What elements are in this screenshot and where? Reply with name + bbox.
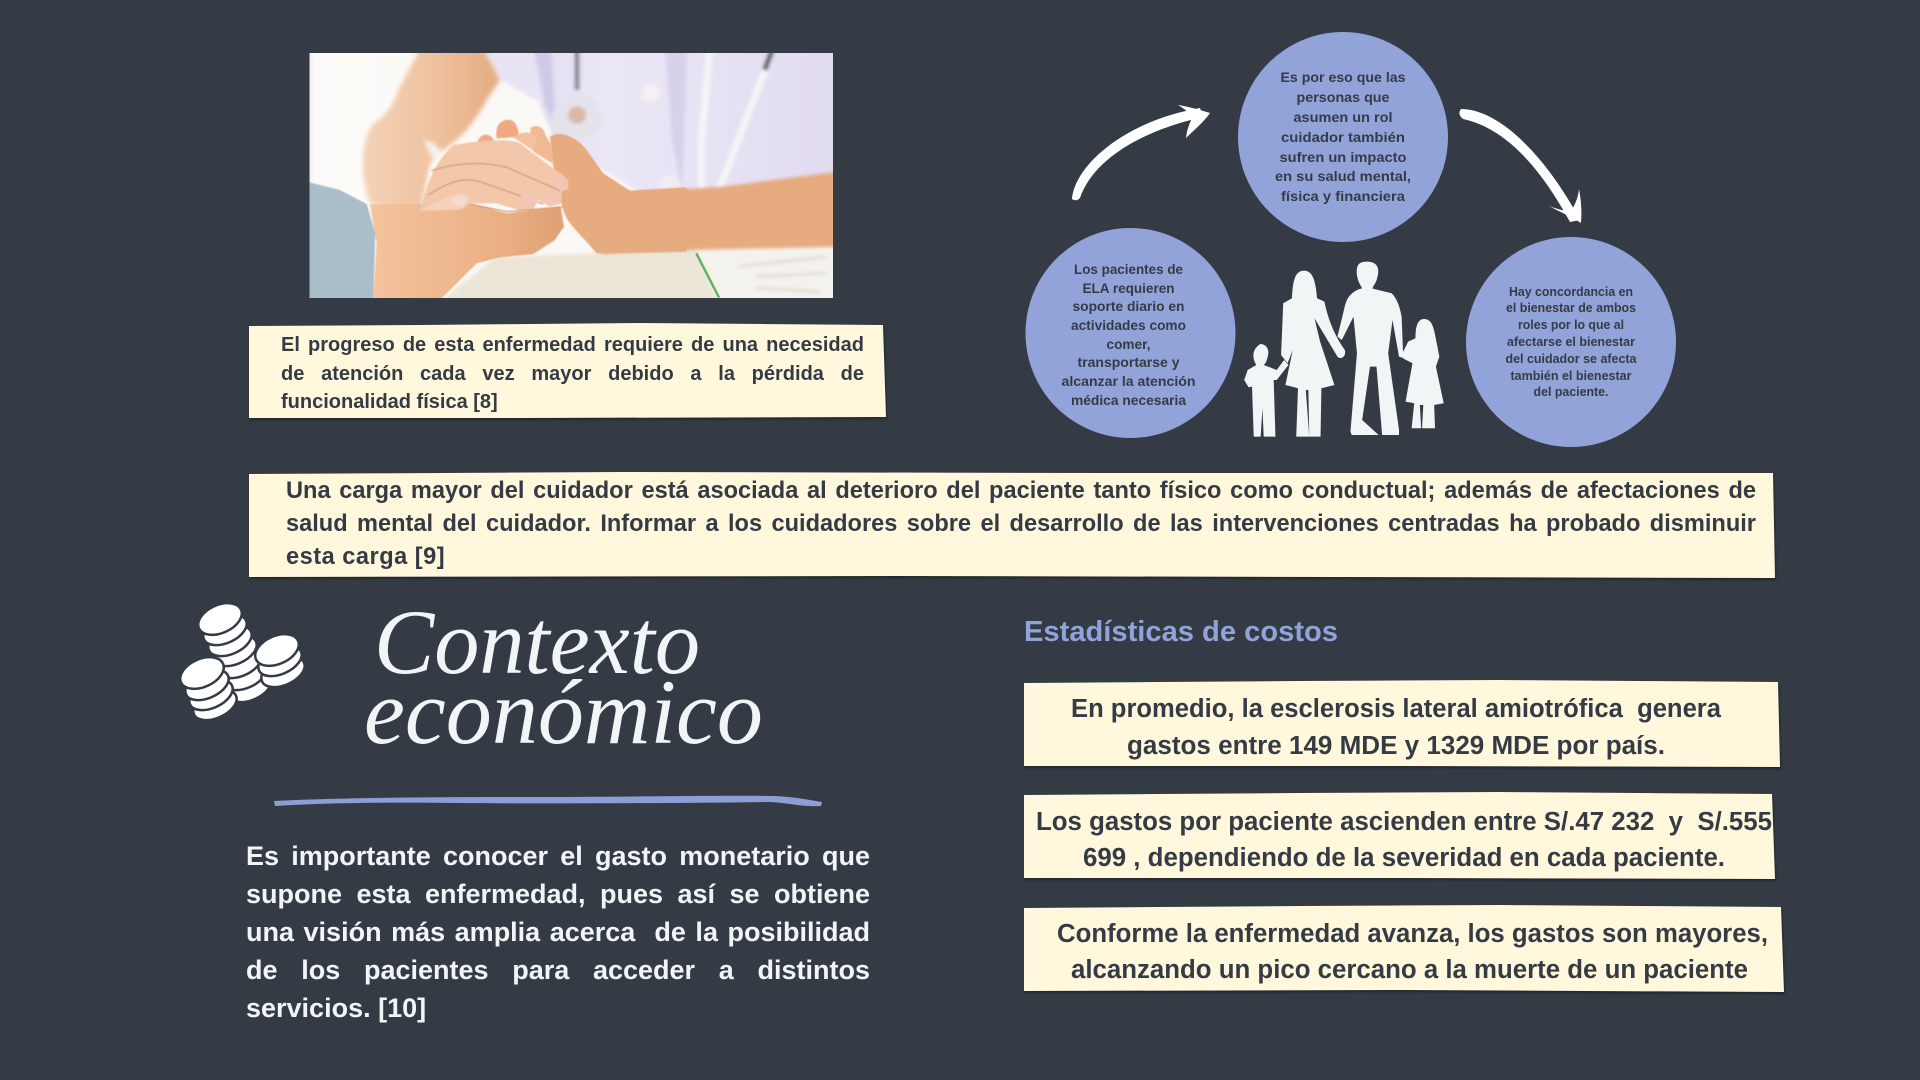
circle: caregivers impact: cuidador también <box>1281 129 1405 145</box>
circle: well-being concordance: el bienestar de ambos <box>1506 300 1636 315</box>
text: why costs matter: una visión más amplia acerca de la posibilidad <box>246 917 870 947</box>
circle: patients need support: Los pacientes de <box>1074 261 1183 277</box>
text: caregiver burden <box>286 478 1756 570</box>
text: caregiver burden: esta carga [9] <box>286 544 445 570</box>
stat box: costs grow with progression: alcanzando un pico cercano a la muerte de un paciente <box>1071 956 1748 984</box>
circle: patients need support: alcanzar la atención <box>1062 373 1196 389</box>
title: Contexto económico: económico <box>364 661 763 763</box>
text: why costs matter: servicios. [10] <box>246 993 426 1023</box>
text: caregiver burden: salud mental del cuidador. Informar a los cuidadores sobre el desarrollo de las intervenciones centradas ha probado disminuir <box>286 511 1756 537</box>
arrow: left circle to top circle <box>1072 105 1210 200</box>
stat box: average cost <box>1024 680 1780 767</box>
text: caregiver burden: Una carga mayor del cuidador está asociada al deterioro del paciente tanto físico como conductual; además de afectaciones de <box>286 478 1756 504</box>
stat box: costs grow with progression <box>1024 905 1784 992</box>
circle: patients need support: transportarse y <box>1078 354 1180 370</box>
circle: well-being concordance: roles por lo que al <box>1518 317 1624 332</box>
title: Contexto económico: Contexto <box>374 591 700 693</box>
stat box: cost per patient: Los gastos por paciente ascienden entre S/.47 232 y S/.555 <box>1036 808 1772 836</box>
title: Contexto económico <box>364 591 763 763</box>
stat box: average cost: gastos entre 149 MDE y 1329 MDE por país. <box>1127 732 1665 760</box>
banner box: caregiver burden <box>249 472 1775 578</box>
photo: caregiver holding patient's hands <box>310 53 833 298</box>
circle: patients need support: médica necesaria <box>1071 392 1186 408</box>
text: why costs matter: Es importante conocer el gasto monetario que <box>246 841 870 871</box>
circle: caregivers impact: asumen un rol <box>1294 109 1392 125</box>
circle: caregivers impact: personas que <box>1296 89 1390 105</box>
circle: well-being concordance <box>1466 237 1676 447</box>
heading: Estadísticas de costos: Estadísticas de costos <box>1024 616 1338 648</box>
circle: caregivers impact: física y financiera <box>1281 188 1405 204</box>
circle: patients need support: actividades como <box>1071 317 1186 333</box>
text: disease progress: de atención cada vez mayor debido a la pérdida de <box>281 362 864 384</box>
circle: well-being concordance: afectarse el bienestar <box>1507 334 1635 349</box>
text: why costs matter <box>246 841 870 1023</box>
text: disease progress <box>281 334 864 413</box>
text: disease progress: funcionalidad física [8] <box>281 391 498 413</box>
stat box: cost per patient: 699 , dependiendo de la severidad en cada paciente. <box>1083 844 1725 872</box>
circle: well-being concordance: del paciente. <box>1534 384 1608 399</box>
circle: caregivers impact: sufren un impacto <box>1280 149 1406 165</box>
circle: caregivers impact: en su salud mental, <box>1275 168 1411 184</box>
circle: patients need support: comer, <box>1106 336 1150 352</box>
circle: patients need support: soporte diario en <box>1072 298 1184 314</box>
circle: patients need support: ELA requieren <box>1082 280 1174 296</box>
icon: family silhouette <box>1244 262 1444 437</box>
circle: caregivers impact: Es por eso que las <box>1280 69 1406 85</box>
brush underline <box>274 796 822 806</box>
circle: well-being concordance: del cuidador se afecta <box>1506 351 1637 366</box>
icon: coin stacks <box>175 597 309 726</box>
text: disease progress: El progreso de esta enfermedad requiere de una necesidad <box>281 334 864 356</box>
circle: patients need support <box>1026 228 1236 438</box>
circle: caregivers impact <box>1238 32 1448 242</box>
circle: well-being concordance: también el bienestar <box>1510 368 1632 383</box>
note box: disease progress <box>249 323 886 418</box>
text: why costs matter: supone esta enfermedad, pues así se obtiene <box>246 879 870 909</box>
circle: well-being concordance: Hay concordancia en <box>1509 284 1633 299</box>
stat box: average cost: En promedio, la esclerosis lateral amiotrófica genera <box>1071 695 1722 723</box>
stat box: cost per patient <box>1024 792 1775 879</box>
text: why costs matter: de los pacientes para acceder a distintos <box>246 955 870 985</box>
stat box: costs grow with progression: Conforme la enfermedad avanza, los gastos son mayores, <box>1057 920 1768 948</box>
arrow: top circle to right circle <box>1459 109 1581 223</box>
